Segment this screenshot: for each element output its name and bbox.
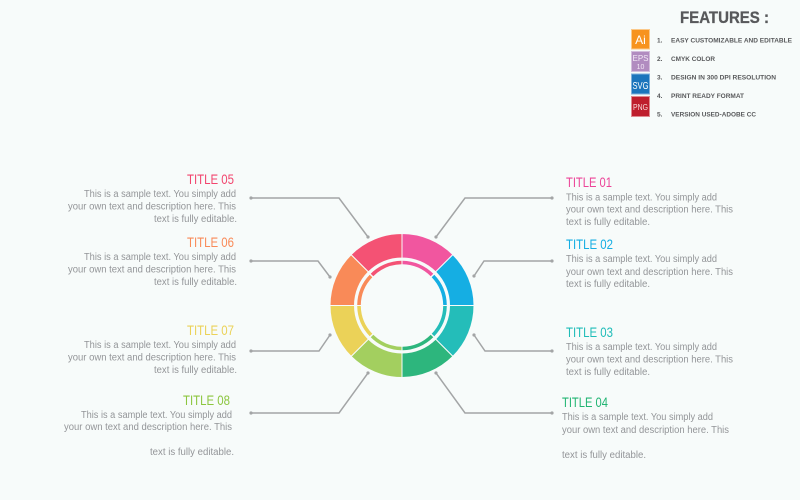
text block: title 06 xyxy=(68,234,237,288)
connector 08 xyxy=(249,371,370,415)
connector 02 xyxy=(472,259,554,278)
segment 04 xyxy=(402,339,453,378)
segment 06 xyxy=(330,255,368,306)
features list: 5. xyxy=(657,112,663,118)
text block: title 02: text is fully editable. xyxy=(566,279,650,290)
text block: title 06: TITLE 06 xyxy=(187,234,234,250)
text block: title 06: your own text and description here. This xyxy=(68,264,236,276)
text block: title 03: TITLE 03 xyxy=(566,324,613,340)
icon: EPS 10: EPS xyxy=(632,54,649,63)
connector 03 xyxy=(472,333,554,353)
text block: title 07: TITLE 07 xyxy=(187,322,234,338)
text block: title 06: This is a sample text. You simply add xyxy=(84,252,236,263)
text block: title 03: This is a sample text. You simply add xyxy=(566,342,717,353)
text block: title 02: TITLE 02 xyxy=(566,236,613,252)
text block: title 08: This is a sample text. You simply add xyxy=(81,410,232,421)
connector 01 xyxy=(434,196,554,239)
segment 03 xyxy=(436,306,474,356)
inner thin ring xyxy=(359,262,445,348)
text block: title 05 xyxy=(68,171,237,225)
text block: title 01: TITLE 01 xyxy=(566,174,612,190)
features list: 2. xyxy=(657,56,663,63)
text block: title 04: TITLE 04 xyxy=(562,394,608,410)
features list xyxy=(657,38,793,118)
text block: title 01: This is a sample text. You simply add xyxy=(566,192,717,204)
icon: PNG: PNG xyxy=(633,103,648,112)
text block: title 04: This is a sample text. You simply add xyxy=(562,412,713,423)
icon: Ai: Ai xyxy=(635,33,646,47)
donut chart xyxy=(330,234,474,378)
text block: title 03: your own text and description here. This xyxy=(566,354,733,366)
text block: title 04 xyxy=(562,394,729,461)
text block: title 01: text is fully editable. xyxy=(566,217,650,228)
text block: title 02 xyxy=(566,236,733,290)
text block: title 08: your own text and description here. This xyxy=(64,422,232,433)
segment 01 xyxy=(402,234,453,272)
segment 05 xyxy=(351,234,402,272)
icon: SVG: SVG xyxy=(632,81,649,92)
text block: title 02: This is a sample text. You simply add xyxy=(566,254,717,265)
text block: title 05: This is a sample text. You simply add xyxy=(84,189,236,200)
text block: title 01: your own text and description here. This xyxy=(566,204,733,216)
text block: title 06: text is fully editable. xyxy=(154,277,237,288)
text block: title 08: TITLE 08 xyxy=(183,392,230,408)
text block: title 04: your own text and description here. This xyxy=(562,425,729,436)
features list: CMYK COLOR xyxy=(671,56,715,63)
text block: title 05: text is fully editable. xyxy=(154,214,237,225)
text block: title 05: your own text and description here. This xyxy=(68,202,236,212)
connector 06 xyxy=(249,259,332,279)
features list: 3. xyxy=(657,74,663,82)
text block: title 02: your own text and description here. This xyxy=(566,267,733,278)
features list: 4. xyxy=(657,93,663,100)
features panel: format icons xyxy=(632,30,650,116)
features list: VERSION USED-ADOBE CC xyxy=(671,112,756,118)
segment 08 xyxy=(351,339,402,378)
features list: 1. xyxy=(657,38,663,44)
connector 04 xyxy=(434,371,554,415)
segment 02 xyxy=(436,255,474,306)
features list: PRINT READY FORMAT xyxy=(671,93,744,100)
text block: title 07: text is fully editable. xyxy=(154,365,237,376)
text block: title 04: text is fully editable. xyxy=(562,450,646,461)
icon: EPS 10: 10 xyxy=(637,64,644,71)
text block: title 08 xyxy=(64,392,234,458)
features list: DESIGN IN 300 DPI RESOLUTION xyxy=(671,74,776,82)
connector 07 xyxy=(249,333,332,353)
text block: title 05: TITLE 05 xyxy=(187,171,234,187)
icon: EPS 10 xyxy=(632,52,650,72)
text block: title 08: text is fully editable. xyxy=(150,447,234,458)
features list: EASY CUSTOMIZABLE AND EDITABLE xyxy=(671,38,793,44)
text block: title 07 xyxy=(68,322,237,376)
connector 05 xyxy=(249,196,370,239)
text block: title 03 xyxy=(566,324,733,378)
text block: title 07: your own text and description here. This xyxy=(68,352,236,364)
text block: title 01 xyxy=(566,174,733,228)
text block: title 03: text is fully editable. xyxy=(566,367,650,378)
text block: title 07: This is a sample text. You simply add xyxy=(84,340,236,351)
segment 07 xyxy=(330,306,368,356)
features heading: FEATURES : xyxy=(680,8,769,27)
